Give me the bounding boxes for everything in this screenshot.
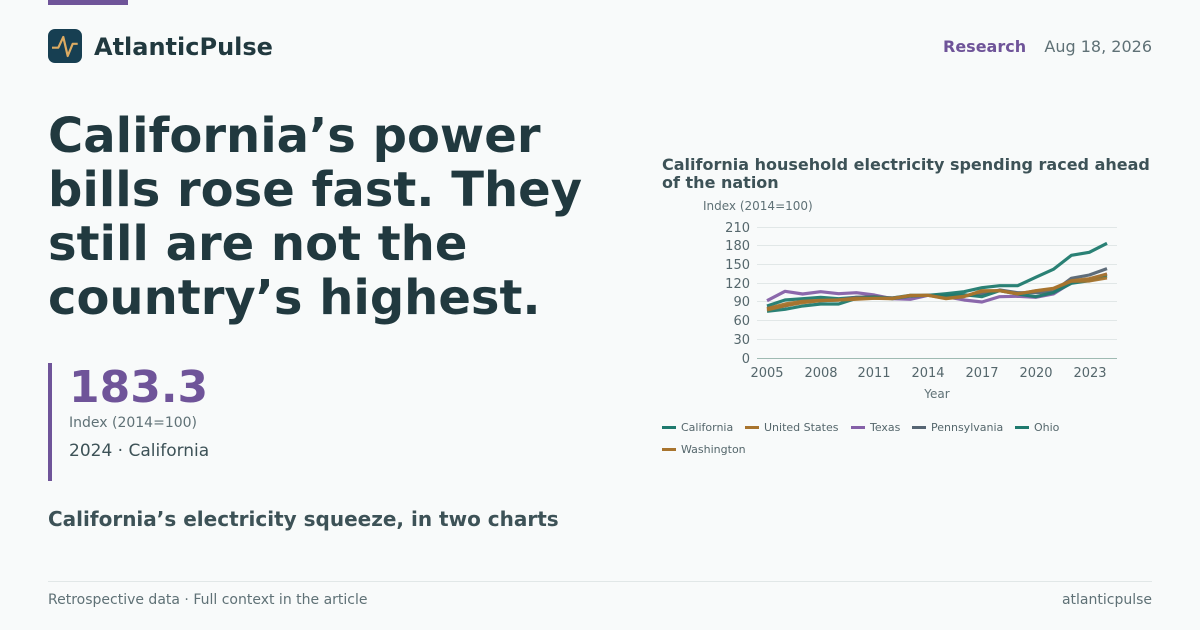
- date: Aug 18, 2026: [1044, 37, 1152, 56]
- x axis labels: [750, 366, 1107, 381]
- x axis labels: 2023: [1073, 366, 1107, 381]
- legend: Texas: Texas: [869, 421, 901, 434]
- chart title: California household electricity spending raced ahead: [662, 155, 1150, 174]
- headline: bills rose fast. They: [48, 162, 582, 218]
- footer divider: [48, 581, 1152, 582]
- legend: Pennsylvania: Pennsylvania: [931, 421, 1003, 434]
- y axis labels: 210: [725, 221, 750, 236]
- headline: [48, 108, 582, 326]
- legend: California: California: [681, 421, 733, 434]
- data lines: [767, 243, 1107, 311]
- headline: California’s power: [48, 108, 540, 164]
- y axis labels: 60: [733, 314, 750, 329]
- x axis labels: 2017: [965, 366, 999, 381]
- legend: United States: United States: [764, 421, 839, 434]
- y axis labels: 180: [725, 239, 750, 254]
- line: Pennsylvania: [767, 269, 1107, 308]
- x axis labels: 2020: [1019, 366, 1053, 381]
- y axis labels: 30: [733, 333, 750, 348]
- subtitle: California’s electricity squeeze, in two charts: [48, 507, 559, 531]
- y axis labels: 90: [733, 295, 750, 310]
- legend: Texas: [851, 421, 901, 434]
- chart title: of the nation: [662, 173, 779, 192]
- line: Ohio: [767, 276, 1107, 311]
- brand name: AtlanticPulse: [94, 33, 273, 61]
- icon: pulse logo: [48, 29, 82, 63]
- y axis labels: 120: [725, 277, 750, 292]
- accent bar: [48, 0, 128, 5]
- x axis labels: 2011: [857, 366, 891, 381]
- stat context: 2024 · California: [69, 441, 209, 461]
- headline: still are not the: [48, 216, 467, 272]
- x axis labels: 2008: [804, 366, 838, 381]
- footer brand: atlanticpulse: [1062, 592, 1152, 608]
- legend: Ohio: [1015, 421, 1060, 434]
- line: Washington: [767, 278, 1107, 309]
- y axis labels: 150: [725, 258, 750, 273]
- x axis title: Year: [923, 387, 950, 401]
- legend: Ohio: Ohio: [1034, 421, 1060, 434]
- y axis labels: 0: [742, 352, 750, 367]
- x axis labels: 2005: [750, 366, 784, 381]
- key stat callout: [48, 363, 252, 481]
- stat value: 183.3: [69, 362, 208, 413]
- line: California: [767, 243, 1107, 306]
- y axis labels: [725, 221, 750, 367]
- headline: country’s highest.: [48, 270, 541, 326]
- y axis title: Index (2014=100): [703, 199, 813, 213]
- section label: Research: [943, 37, 1026, 56]
- line: United States: [767, 274, 1107, 310]
- legend: Washington: Washington: [681, 443, 746, 456]
- line: Texas: [767, 274, 1107, 302]
- chart title: [662, 155, 1150, 192]
- x axis labels: 2014: [911, 366, 945, 381]
- stat unit: Index (2014=100): [69, 415, 197, 431]
- legend: [662, 421, 1060, 456]
- footer note: Retrospective data · Full context in the article: [48, 592, 367, 608]
